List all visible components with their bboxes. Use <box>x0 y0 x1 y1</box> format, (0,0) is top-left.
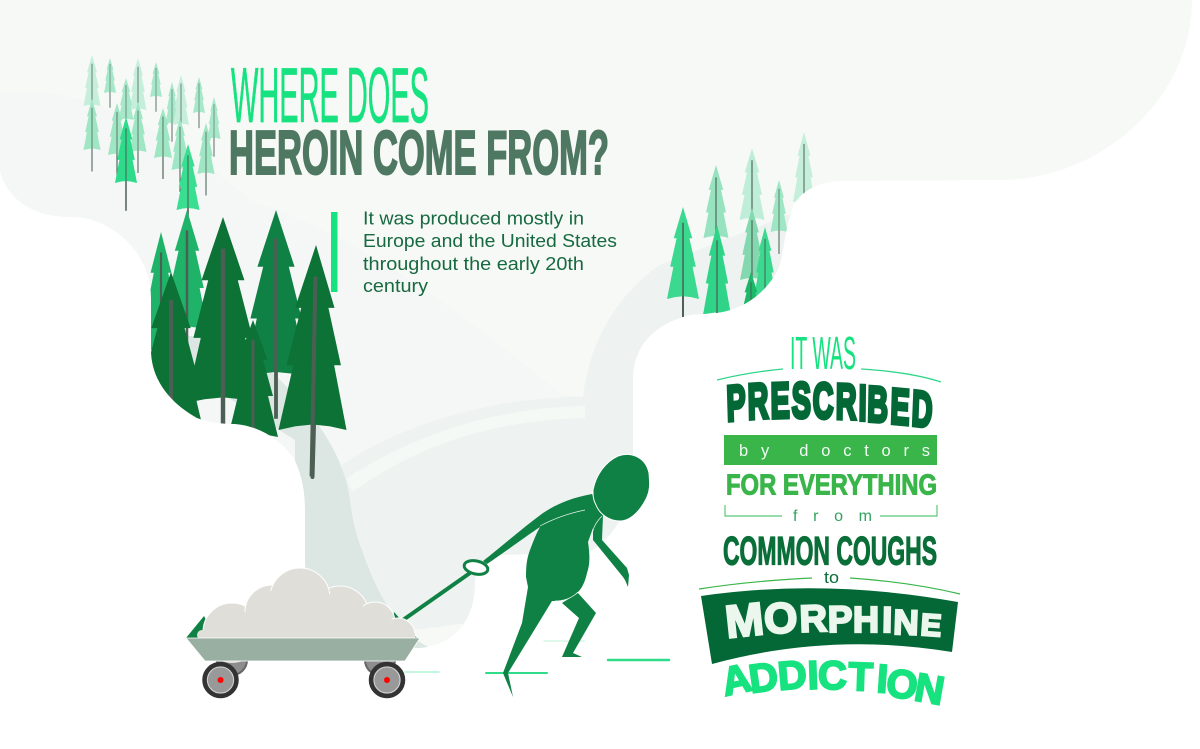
front arm <box>593 515 629 587</box>
body text: It was produced mostly in <box>363 208 584 228</box>
rear wheels <box>217 645 395 675</box>
wagon body <box>186 638 420 661</box>
title: HEROIN COME FROM? <box>229 119 609 188</box>
lettering block: IT WAS <box>790 327 856 379</box>
body text: throughout the early 20th <box>363 253 584 274</box>
big tree trunk overlapping the mask <box>312 425 314 477</box>
body highlights <box>540 510 602 601</box>
wagon <box>186 568 470 696</box>
morphine banner: I <box>882 599 893 640</box>
body text <box>363 208 617 296</box>
figure pulling the wagon <box>463 454 650 697</box>
prescribed: PRESCRIBED <box>726 372 934 439</box>
torso, arm and front leg <box>483 494 603 697</box>
load of powder <box>197 568 415 663</box>
morphine banner: P <box>827 599 853 640</box>
accent bar <box>331 212 338 292</box>
body text: Europe and the United States <box>363 230 617 251</box>
morphine banner <box>701 588 958 664</box>
pull handle <box>403 573 470 620</box>
by doctors band <box>724 435 937 465</box>
title: WHERE DOES <box>231 51 429 139</box>
morphine banner: O <box>762 594 799 644</box>
morphine banner: E <box>920 607 943 643</box>
head <box>593 454 650 521</box>
motion lines <box>405 641 669 673</box>
handle ring <box>463 559 489 576</box>
to with arc rules <box>699 568 960 594</box>
title <box>229 51 609 188</box>
front wheels <box>204 664 403 696</box>
morphine banner: R <box>799 598 828 641</box>
by doctors band: by doctors <box>739 442 930 460</box>
trees: right forest <box>667 132 815 357</box>
lettering block <box>699 327 960 714</box>
trees: pale distant left forest <box>84 55 220 238</box>
arc rules top <box>717 369 941 382</box>
from with brackets <box>725 505 937 525</box>
from with brackets: from <box>793 508 872 525</box>
morphine banner: N <box>893 603 919 643</box>
common coughs: COMMON COUGHS <box>723 530 937 574</box>
morphine banner: H <box>853 599 879 640</box>
to with arc rules: to <box>824 568 839 587</box>
wagon back plate <box>186 612 417 640</box>
trees: dark foreground left forest <box>137 210 350 478</box>
rear leg <box>562 593 596 657</box>
morphine banner: M <box>723 592 766 648</box>
addiction: ADDICTION <box>718 653 948 714</box>
for everything: FOR EVERYTHING <box>726 470 937 502</box>
body text: century <box>363 275 429 296</box>
